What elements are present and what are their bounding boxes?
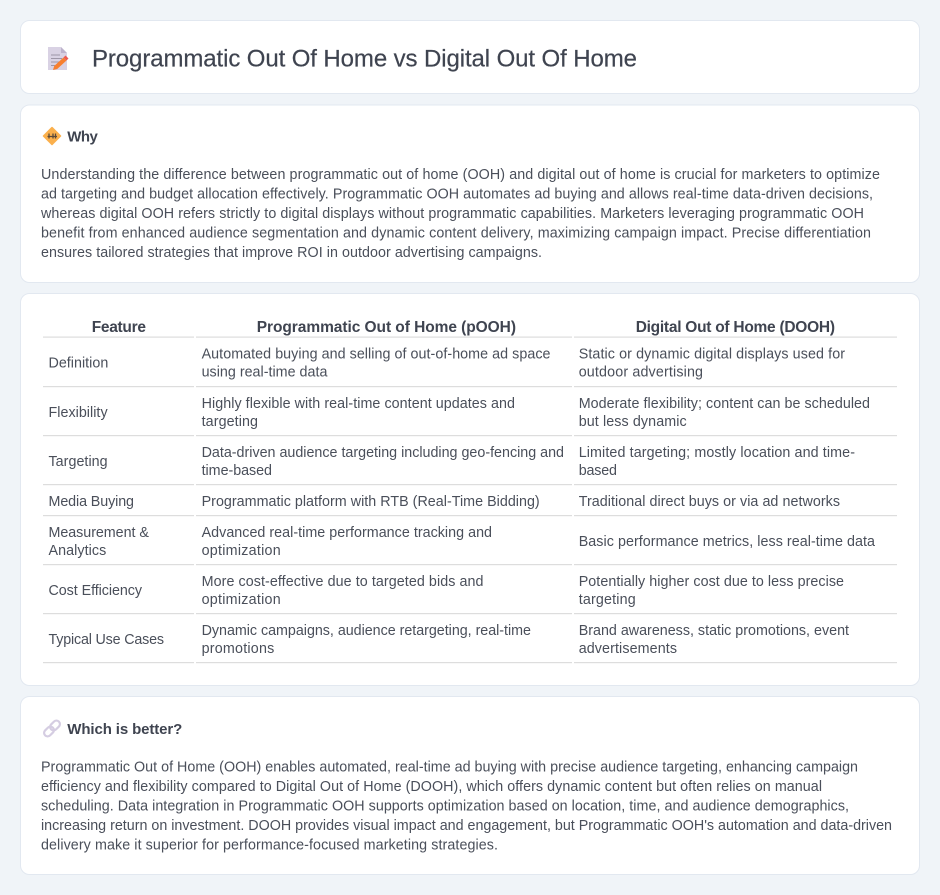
icon: warning diamond <box>44 128 60 144</box>
table header row: Programmatic Out of Home (pOOH) <box>257 319 516 336</box>
row: typical use cases: Brand awareness, static promotions, event <box>579 623 849 639</box>
heading: which is better: Which is better? <box>67 721 182 738</box>
row: measurement and analytics: Measurement & <box>48 525 149 541</box>
panel: comparison table <box>20 294 920 686</box>
row: flexibility: Highly flexible with real-time content updates and <box>202 396 515 412</box>
icon: chain link <box>43 719 61 738</box>
row: media buying <box>43 494 897 516</box>
row: typical use cases: Typical Use Cases <box>48 632 164 648</box>
row: cost efficiency: targeting <box>579 592 636 608</box>
text block: why paragraph: ensures tailored strategies that improve ROI in outdoor advertising campaigns. <box>41 245 542 261</box>
row: definition: Automated buying and selling of out-of-home ad space <box>202 346 551 362</box>
table header row <box>43 319 897 338</box>
row: definition: outdoor advertising <box>579 364 703 380</box>
row: measurement and analytics: Advanced real-time performance tracking and <box>202 525 492 541</box>
text block: why paragraph: ad targeting and budget allocation effectively. Programmatic OOH automates ad buying and allows real-time data-driven decisions, <box>41 186 873 202</box>
text block: why paragraph: whereas digital OOH refers strictly to digital displays without programmatic capabilities. Marketers leveraging programmatic OOH <box>40 206 864 222</box>
row: media buying: Media Buying <box>48 494 134 510</box>
row: targeting: Targeting <box>48 454 108 470</box>
row: targeting: Limited targeting; mostly location and time- <box>579 445 855 461</box>
row: definition: Static or dynamic digital displays used for <box>579 346 845 362</box>
text block: which is better paragraph: efficiency and flexibility compared to Digital Out of Home (DOOH), which offers dynamic content but often relies on manual <box>41 779 822 795</box>
row: media buying: Traditional direct buys or via ad networks <box>579 494 840 510</box>
row: flexibility: Flexibility <box>48 405 108 421</box>
row: flexibility <box>43 396 897 436</box>
row: typical use cases: advertisements <box>579 641 677 657</box>
text block: which is better paragraph: increasing return on investment. DOOH provides visual impact and engagement, but Programmatic OOH's automation and data-driven <box>41 818 892 834</box>
table header row: Digital Out of Home (DOOH) <box>636 319 835 336</box>
row: measurement and analytics: optimization <box>202 543 281 559</box>
row: measurement and analytics <box>43 525 897 565</box>
panel: why <box>20 105 920 282</box>
icon: document with pencil <box>48 47 68 70</box>
text block: which is better paragraph: scheduling. Data integration in Programmatic OOH supports optimization based on location, time, and audience demographics, <box>41 798 849 814</box>
heading: why: Why <box>67 129 98 146</box>
title: Programmatic Out Of Home vs Digital Out Of Home <box>92 46 637 72</box>
panel: header <box>20 20 920 94</box>
row: targeting: Data-driven audience targeting including geo-fencing and <box>202 445 564 461</box>
panel: which is better <box>20 696 920 874</box>
row: typical use cases <box>43 623 897 663</box>
row: targeting: based <box>579 463 617 479</box>
row: definition <box>43 346 897 387</box>
row: cost efficiency: optimization <box>202 592 281 608</box>
row: cost efficiency: Potentially higher cost due to less precise <box>579 574 844 590</box>
row: cost efficiency: More cost-effective due to targeted bids and <box>202 574 484 590</box>
text block: which is better paragraph: Programmatic Out of Home (OOH) enables automated, real-time ad buying with precise audience targeting, enhancing campaign <box>41 760 858 776</box>
row: flexibility: Moderate flexibility; content can be scheduled <box>579 396 870 412</box>
text block: which is better paragraph <box>41 760 892 854</box>
table header row: Feature <box>92 319 146 336</box>
row: definition: Definition <box>48 356 108 372</box>
row: media buying: Programmatic platform with RTB (Real-Time Bidding) <box>202 494 540 510</box>
row: flexibility: but less dynamic <box>579 414 687 430</box>
row: targeting: time-based <box>202 463 272 479</box>
row: typical use cases: promotions <box>202 641 274 657</box>
row: measurement and analytics: Basic performance metrics, less real-time data <box>579 534 875 550</box>
row: cost efficiency: Cost Efficiency <box>48 583 143 599</box>
text block: why paragraph <box>40 167 880 261</box>
row: typical use cases: Dynamic campaigns, audience retargeting, real-time <box>202 623 531 639</box>
row: targeting <box>43 445 897 485</box>
row: flexibility: targeting <box>202 414 258 430</box>
text block: why paragraph: Understanding the difference between programmatic out of home (OOH) and digital out of home is crucial for marketers to optimize <box>41 167 880 183</box>
row: definition: using real-time data <box>202 364 327 380</box>
row: measurement and analytics: Analytics <box>48 543 106 559</box>
text block: why paragraph: benefit from enhanced audience segmentation and dynamic content delivery, maximizing campaign impact. Precise differentiation <box>41 226 871 242</box>
text block: which is better paragraph: delivery make it superior for performance-focused marketing strategies. <box>41 838 498 854</box>
row: cost efficiency <box>43 574 897 614</box>
